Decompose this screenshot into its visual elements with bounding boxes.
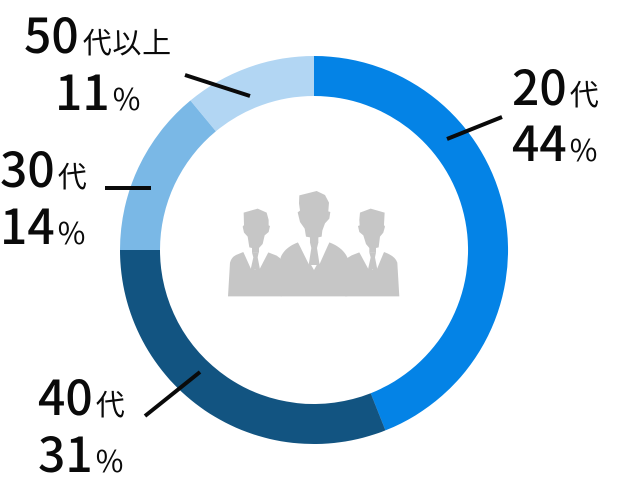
label: 20代 44%: 44% bbox=[512, 105, 597, 175]
label: 40代 31%: 40代 bbox=[38, 359, 125, 429]
centre person bbox=[281, 191, 347, 296]
leader line: 20代 bbox=[447, 117, 502, 139]
segment: 20代 44% bbox=[314, 56, 508, 430]
segment: 40代 31% bbox=[120, 250, 385, 444]
label: 20代 44%: 20代 bbox=[512, 49, 599, 119]
segment: 50代以上 11% bbox=[190, 56, 314, 131]
label: 30代 14%: 14% bbox=[0, 188, 85, 258]
label: 50代以上 11% bbox=[24, 0, 172, 124]
label: 30代 14%: 30代 bbox=[0, 131, 87, 201]
label: 40代 31% bbox=[38, 359, 125, 486]
label: 40代 31%: 31% bbox=[38, 416, 123, 486]
segment: 30代 14% bbox=[120, 100, 216, 250]
leader line: 40代 bbox=[145, 372, 200, 416]
label: 20代 44% bbox=[512, 49, 599, 175]
label: 50代以上 11%: 11% bbox=[55, 54, 140, 124]
left person bbox=[228, 209, 282, 296]
right person bbox=[345, 209, 399, 296]
donut chart bbox=[120, 56, 508, 444]
leader line: 30代 bbox=[105, 186, 151, 190]
label: 30代 14% bbox=[0, 131, 87, 258]
icon: three business people bbox=[228, 191, 399, 296]
leader line: 50代以上 bbox=[185, 75, 250, 96]
